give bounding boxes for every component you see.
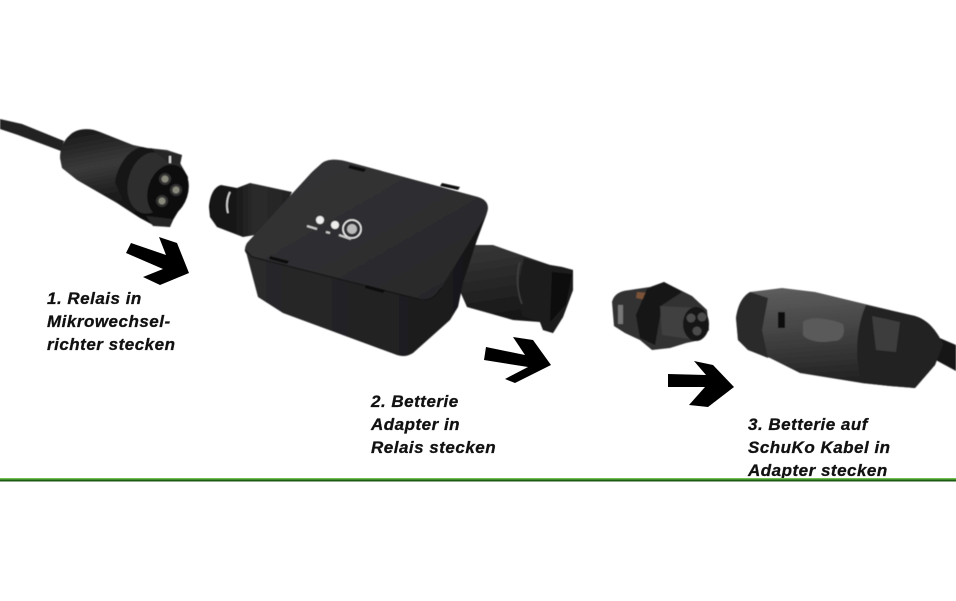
step 2 label: 2. Betterie [370, 392, 459, 411]
left plug stub [209, 183, 292, 237]
box top face [245, 160, 488, 300]
step 3 label: 3. Betterie auf [748, 415, 870, 434]
step 1 label: 1. Relais in [47, 289, 142, 308]
step 2 label: Adapter in [370, 415, 460, 434]
arrow 1 [126, 237, 189, 285]
relay adapter box [209, 160, 573, 356]
arrow 3 [668, 361, 734, 407]
step 1 label: Mikrowechsel- [47, 312, 171, 331]
status indicators [307, 216, 361, 239]
small adapter plug [612, 282, 709, 350]
step 2 label: Relais stecken [371, 438, 496, 457]
green footer rule [0, 478, 956, 482]
box lower body [245, 213, 487, 356]
connector: relay plug with cable [0, 119, 195, 227]
step 3 label: SchuKo Kabel in [748, 438, 891, 457]
arrow 2 [484, 337, 551, 383]
step 1 label [47, 289, 175, 354]
step 1 label: richter stecken [47, 335, 175, 354]
step 2 label [370, 392, 496, 457]
right plug stub [455, 245, 573, 333]
step 3 label [747, 415, 891, 480]
schuko cable plug [736, 288, 956, 388]
step 3 label: Adapter stecken [747, 461, 888, 480]
